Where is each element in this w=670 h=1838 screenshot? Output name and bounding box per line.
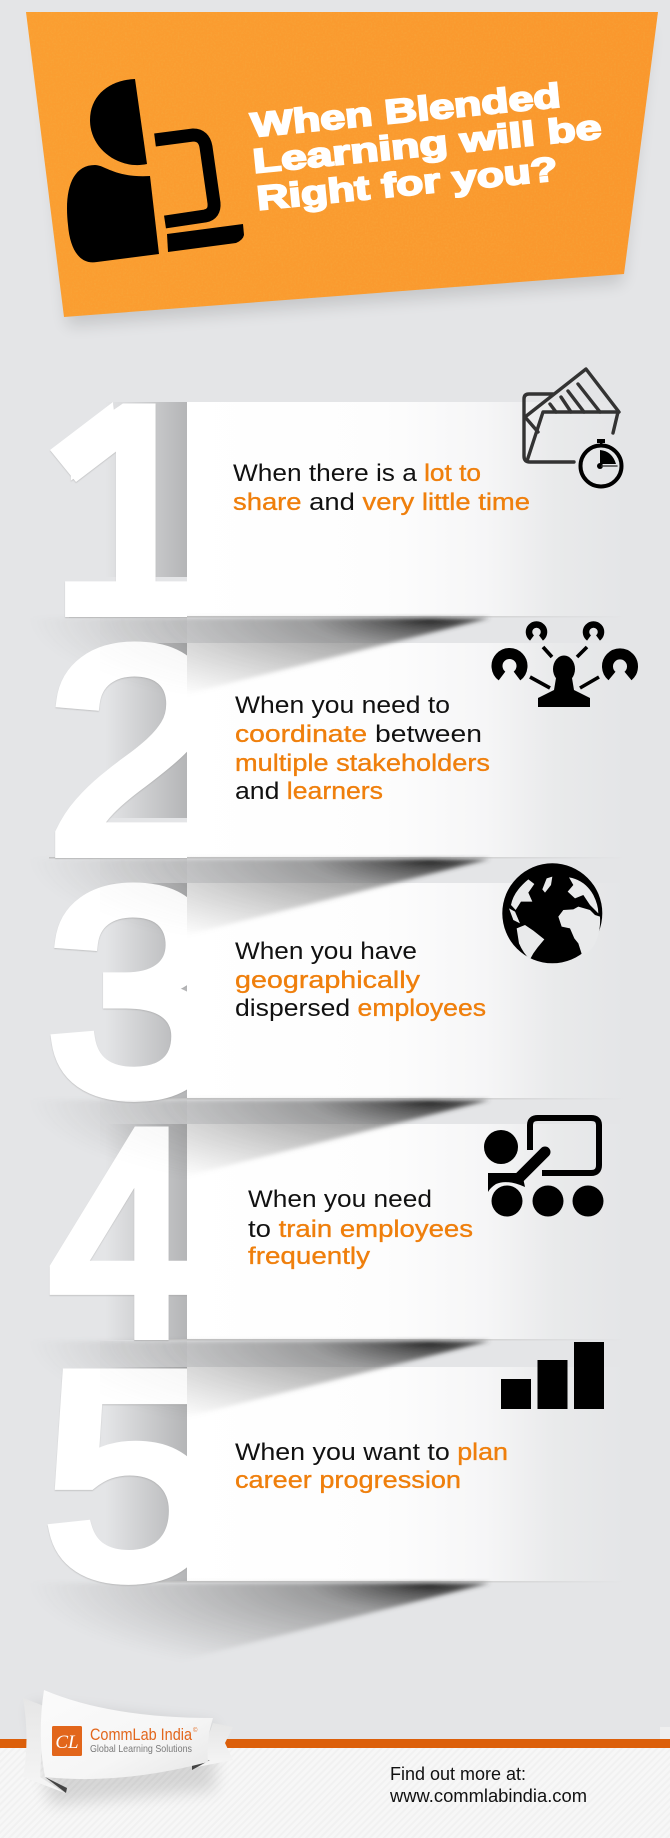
title bbox=[249, 77, 603, 218]
big paper numerals bbox=[48, 402, 187, 1586]
logo wordmark: © bbox=[193, 1727, 198, 1734]
text: train employees: to train employees bbox=[248, 1216, 473, 1243]
footer link text: Find out more at: bbox=[390, 1764, 526, 1784]
text: lot to share bbox=[233, 460, 530, 516]
text: coordinate stakeholders: multiple stakeholders bbox=[235, 750, 490, 777]
text: geographically dispersed: geographically bbox=[235, 967, 420, 994]
text: coordinate stakeholders: coordinate between bbox=[235, 721, 482, 748]
text: geographically dispersed: When you have bbox=[235, 938, 417, 965]
text: train employees: When you need bbox=[248, 1186, 432, 1213]
icon: stakeholder network bbox=[497, 625, 632, 707]
panel 4: train employees bbox=[105, 1118, 625, 1340]
text: coordinate stakeholders: When you need to bbox=[235, 692, 450, 719]
text: train employees bbox=[248, 1186, 473, 1270]
panel 5: career progression bbox=[105, 1342, 625, 1582]
icon: globe bbox=[502, 863, 602, 963]
numeral 3: 3 bbox=[47, 830, 221, 1153]
logo ribbon bbox=[23, 1690, 233, 1805]
text: career progression bbox=[235, 1439, 508, 1494]
text: lot to share: When there is a lot to bbox=[233, 460, 481, 487]
logo wordmark: CommLab India bbox=[90, 1725, 192, 1744]
text: career progression: When you want to plan bbox=[235, 1439, 508, 1466]
numeral 4: 4 bbox=[50, 1071, 195, 1395]
header banner bbox=[0, 0, 670, 330]
numeral 5: 5 bbox=[44, 1313, 218, 1636]
icon: learner at laptop bbox=[67, 79, 244, 262]
title: Learning will be bbox=[251, 108, 603, 181]
paper shadows under panels bbox=[10, 618, 490, 1703]
logo mark: CL bbox=[55, 1732, 79, 1753]
footer link text: www.commlabindia.com bbox=[389, 1786, 587, 1806]
text: train employees: frequently bbox=[248, 1243, 370, 1270]
text: coordinate stakeholders: and learners bbox=[235, 778, 383, 805]
footer band bbox=[0, 1727, 670, 1838]
logo wordmark: Global Learning Solutions bbox=[90, 1743, 192, 1755]
text: lot to share: share and very little time bbox=[233, 489, 530, 516]
footer link text bbox=[389, 1764, 587, 1806]
panel 1: lot to share bbox=[69, 369, 625, 618]
numeral 2: 2 bbox=[47, 589, 221, 912]
text: geographically dispersed: dispersed employees bbox=[235, 995, 486, 1022]
text: coordinate stakeholders bbox=[235, 692, 490, 805]
numeral 1 bbox=[50, 402, 187, 618]
icon: rising bars bbox=[501, 1342, 604, 1409]
icon: folder and stopwatch bbox=[524, 369, 622, 486]
icon: classroom trainer bbox=[484, 1118, 604, 1216]
logo mark bbox=[52, 1726, 82, 1756]
numeral 1: 1 bbox=[50, 348, 211, 672]
logo wordmark bbox=[90, 1725, 198, 1755]
title: When Blended bbox=[249, 77, 562, 145]
panel 3: geographically dispersed bbox=[105, 863, 625, 1100]
title: Right for you? bbox=[255, 150, 559, 218]
text: geographically dispersed bbox=[235, 938, 486, 1022]
text: career progression: career progression bbox=[235, 1467, 461, 1494]
panel 2: coordinate bbox=[49, 625, 632, 858]
